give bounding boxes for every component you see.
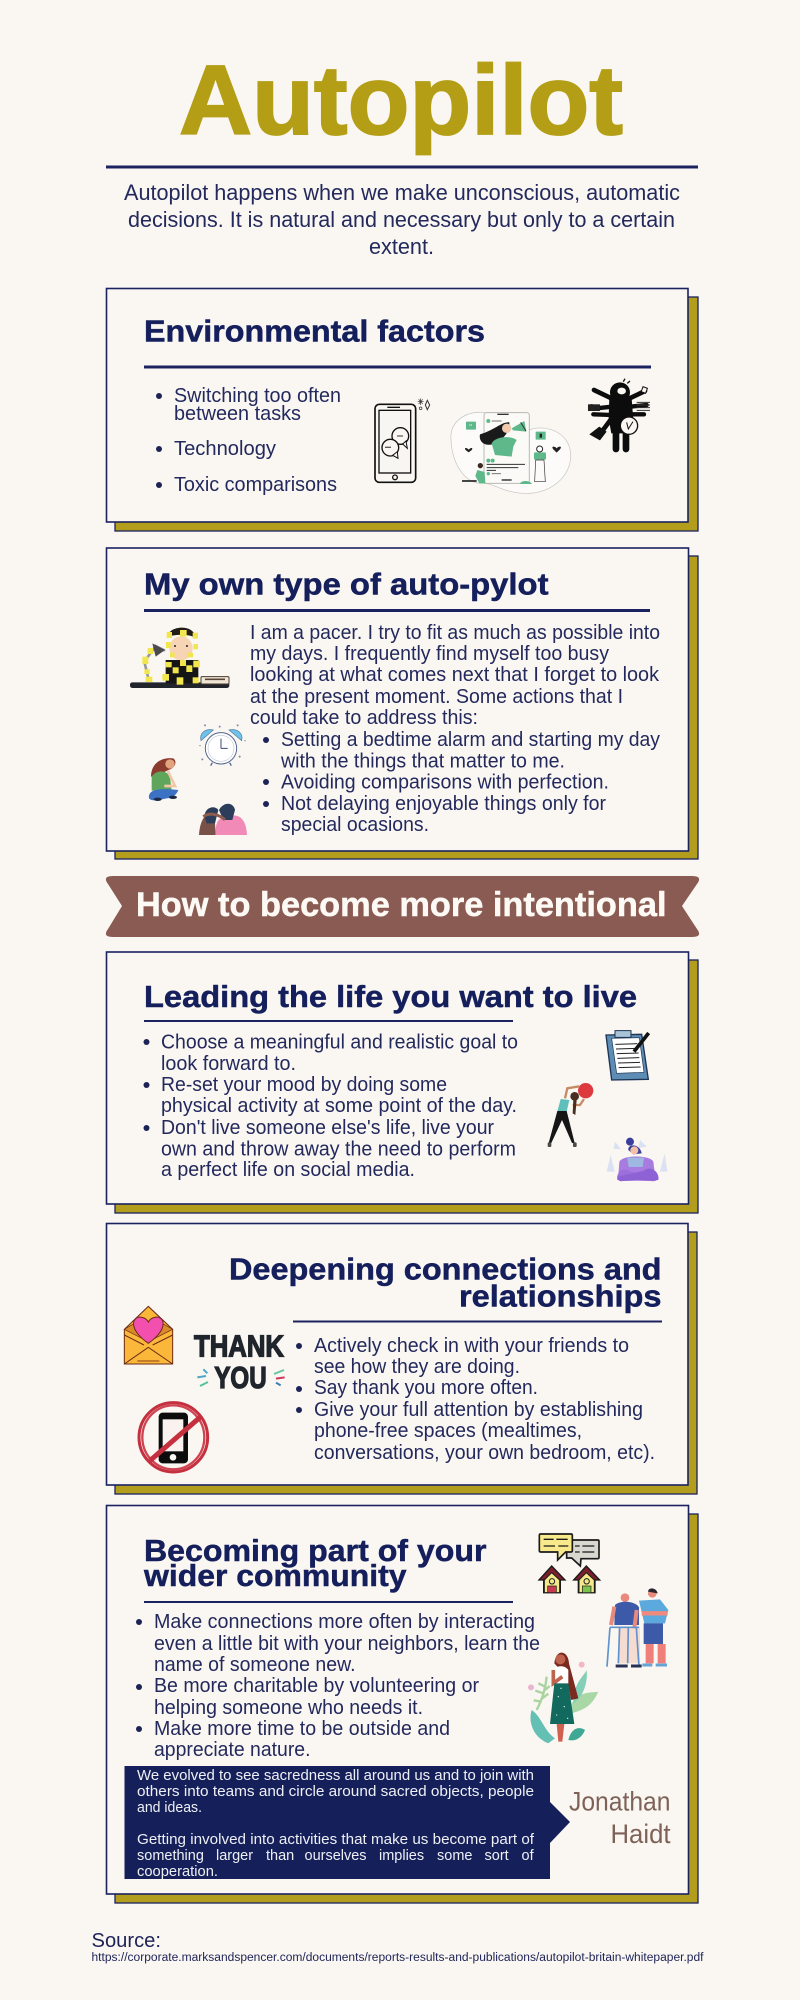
list: deepening connections: Say thank you more often. — [314, 1376, 538, 1399]
panel: environmental factors — [106, 288, 698, 531]
list: deepening connections: phone-free spaces (mealtimes, — [314, 1419, 582, 1442]
quote attribution: Jonathan — [569, 1786, 670, 1816]
source: https://corporate.marksandspencer.com/documents/reports-results-and-publications/autopilot-britain-whitepaper.pdf — [92, 1952, 704, 1964]
heading: environmental factors: Environmental factors — [144, 314, 485, 348]
icon: stressed multitasking figure — [588, 379, 650, 449]
list: actions — [263, 728, 661, 836]
panel: leading the life you want to live — [106, 952, 698, 1213]
icon: meditating woman with crossed arms — [607, 1138, 667, 1181]
list: actions: special ocasions. — [281, 813, 429, 836]
paragraph: pacer description: I am a pacer. I try to fit as much as possible into — [250, 621, 660, 644]
paragraph: pacer description: looking at what comes next that I forget to look — [250, 663, 660, 686]
quote attribution — [569, 1786, 671, 1849]
list: community: helping someone who needs it. — [154, 1696, 423, 1719]
list: leading the life: look forward to. — [161, 1052, 296, 1075]
callout: quote box: sort — [484, 1848, 509, 1864]
list: community: Make connections more often by interacting — [154, 1610, 535, 1633]
quote attribution: Haidt — [610, 1819, 671, 1849]
heading: becoming part of your wider community: wider community — [143, 1558, 407, 1593]
icon: clipboard — [606, 1031, 649, 1080]
icon: person covered in sticky notes — [130, 628, 229, 688]
list: actions: with the things that matter to me. — [280, 750, 565, 772]
callout: quote box: and ideas. — [137, 1800, 202, 1816]
list: leading the life: own and throw away the need to perform — [161, 1138, 516, 1160]
heading: leading the life: Leading the life you want to live — [144, 979, 637, 1014]
list: actions: Setting a bedtime alarm and starting my day — [281, 728, 661, 751]
paragraph: pacer description: my days. I frequently find myself too busy — [250, 642, 610, 665]
list: environmental factors: Toxic comparisons — [174, 473, 337, 496]
callout: quote box: implies — [379, 1848, 424, 1864]
paragraph: pacer description: could take to address this: — [250, 706, 478, 729]
callout: quote box: of — [522, 1848, 535, 1864]
icon: phone with chat bubbles — [375, 398, 430, 482]
list: community: appreciate nature. — [154, 1738, 310, 1761]
heading: becoming part of your wider community: Becoming part of your — [144, 1533, 486, 1568]
list: leading the life — [144, 1030, 518, 1181]
callout: quote box: We evolved to see sacredness all around us and to join with — [137, 1768, 534, 1784]
callout: quote box: Getting involved into activities that make us become part of — [137, 1832, 535, 1848]
list: environmental factors: between tasks — [174, 402, 301, 425]
heading: my own type of auto-pylot: My own type of auto-pylot — [144, 566, 548, 602]
icon: thank you lettering: THANK — [194, 1330, 284, 1364]
source: Source: — [92, 1930, 161, 1952]
list: community: even a little bit with your neighbors, learn the — [154, 1632, 540, 1655]
list: leading the life: Re-set your mood by doing some — [161, 1073, 447, 1096]
panel: deepening connections and relationships — [106, 1224, 697, 1494]
icon: social media illustration — [451, 412, 571, 493]
icon: chat bubbles and houses — [539, 1534, 600, 1593]
list: deepening connections — [296, 1334, 655, 1464]
callout: quote box: cooperation. — [137, 1864, 218, 1880]
callout: quote box: some — [437, 1848, 472, 1864]
panel: my own type of auto-pylot — [106, 548, 698, 859]
paragraph: pacer description: at the present moment. Some actions that I — [250, 685, 623, 708]
icon: thank you lettering — [194, 1330, 285, 1395]
list: leading the life: a perfect life on social media. — [161, 1158, 415, 1181]
list: leading the life: Choose a meaningful and realistic goal to — [161, 1030, 518, 1054]
icon: man helping elderly person with walker — [607, 1588, 668, 1667]
icon: friends hugging — [199, 804, 247, 835]
heading: deepening connections: Deepening connections and — [229, 1252, 662, 1286]
icon: no phone sign — [139, 1403, 208, 1472]
heading: deepening connections — [229, 1252, 662, 1314]
list: community: Be more charitable by volunteering or — [154, 1674, 479, 1697]
icon: envelope with heart — [124, 1306, 173, 1364]
list: environmental factors: Switching too often — [174, 384, 341, 407]
list: deepening connections: Actively check in with your friends to — [314, 1334, 629, 1357]
banner: how to become more intentional: How to become more intentional — [136, 886, 666, 924]
list: environmental factors: Technology — [174, 437, 277, 460]
list: community: name of someone new. — [154, 1653, 356, 1676]
callout: quote box: ourselves — [304, 1848, 367, 1864]
list: leading the life: physical activity at some point of the day. — [161, 1094, 517, 1117]
list: community — [136, 1610, 540, 1761]
source — [92, 1930, 704, 1964]
list: deepening connections: Give your full attention by establishing — [314, 1398, 643, 1421]
heading: becoming part of your wider community — [143, 1533, 486, 1593]
banner: how to become more intentional — [106, 876, 699, 937]
list: deepening connections: conversations, your own bedroom, etc). — [314, 1441, 655, 1464]
list: actions: Not delaying enjoyable things only for — [281, 792, 606, 815]
list: deepening connections: see how they are doing. — [314, 1355, 520, 1378]
callout: quote box: others into teams and circle around sacred objects, people — [137, 1784, 534, 1800]
list: community: Make more time to be outside and — [154, 1717, 450, 1740]
intro text — [124, 180, 680, 259]
callout: quote box: than — [266, 1848, 294, 1864]
callout: quote box: larger — [216, 1848, 253, 1864]
callout: quote box: something — [137, 1848, 204, 1864]
list: environmental factors — [156, 384, 341, 496]
icon: alarm clock — [199, 724, 246, 766]
list: leading the life: Don't live someone else's life, live your — [161, 1116, 494, 1139]
title: Autopilot — [179, 45, 623, 155]
panel: becoming part of your wider community — [106, 1506, 698, 1903]
intro text: Autopilot happens when we make unconscious, automatic — [124, 180, 680, 205]
callout: quote box — [124, 1766, 570, 1880]
icon: woman among plants — [528, 1653, 598, 1743]
icon: woman exercising with ball — [548, 1083, 593, 1147]
icon: thoughtful woman — [149, 758, 178, 801]
heading: deepening connections: relationships — [459, 1278, 662, 1314]
intro text: extent. — [369, 234, 434, 259]
paragraph: pacer description — [250, 621, 660, 729]
list: actions: Avoiding comparisons with perfection. — [281, 770, 609, 794]
icon: thank you lettering: YOU — [214, 1361, 267, 1395]
intro text: decisions. It is natural and necessary but only to a certain — [128, 207, 675, 232]
